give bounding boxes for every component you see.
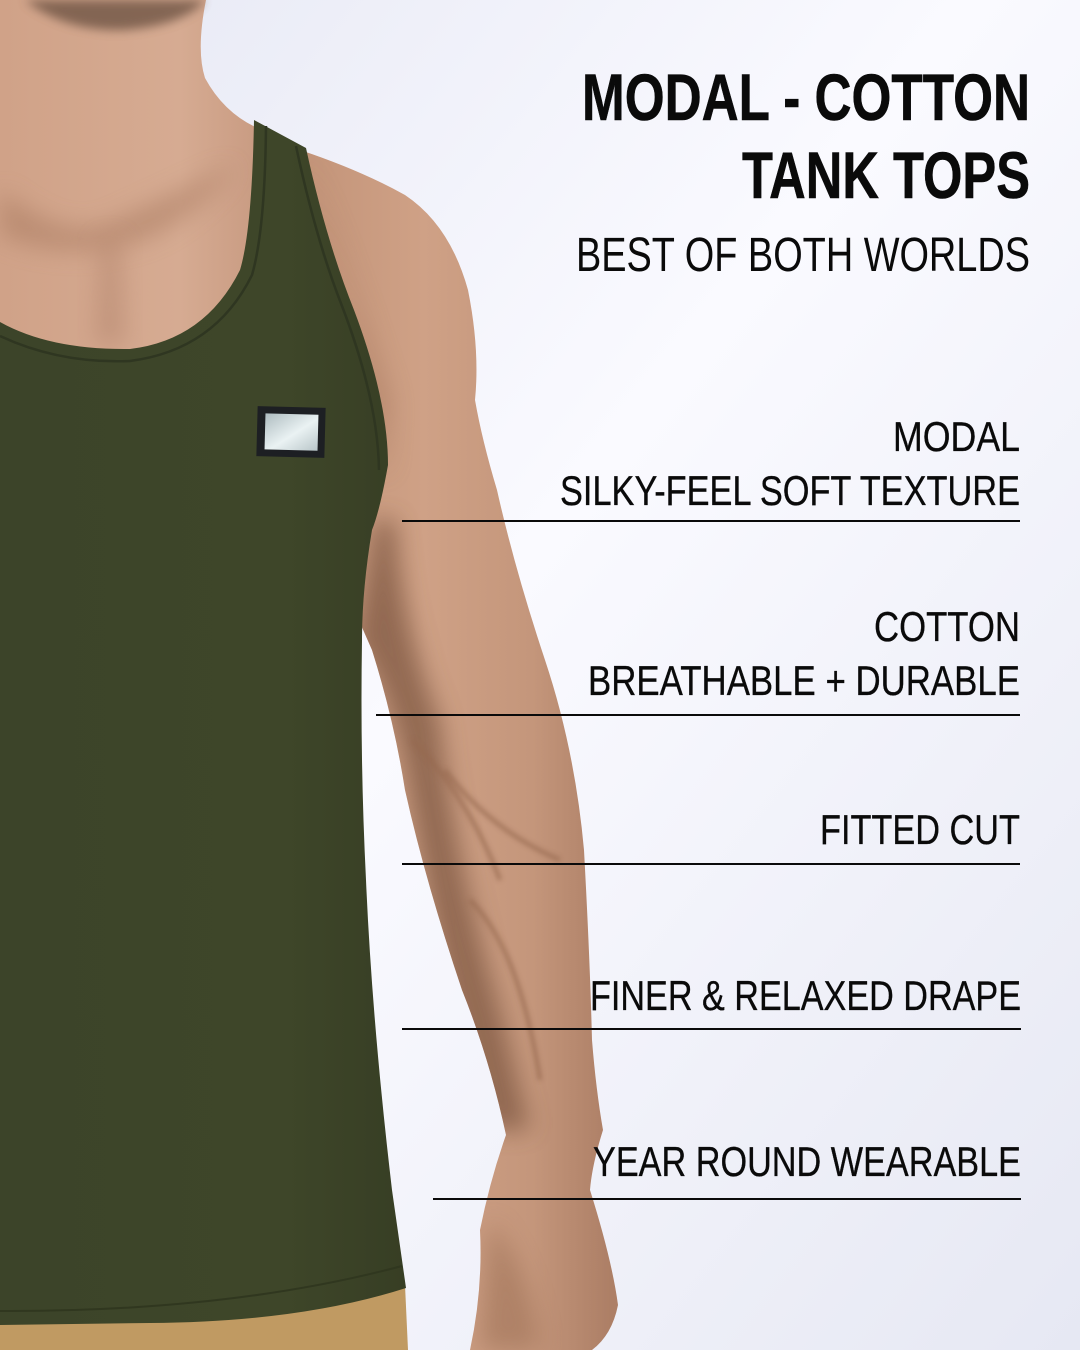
title [582, 60, 1030, 212]
neckline and armhole binding [0, 126, 379, 470]
tank top [0, 120, 406, 1325]
forearm veins [439, 770, 560, 1080]
feature: fitted cut: FITTED CUT [820, 806, 1020, 853]
feature: modal [402, 413, 1020, 522]
feature: modal: MODAL [893, 413, 1020, 460]
inner arm shadow [355, 520, 530, 1130]
collarbone and neck shading [0, 165, 235, 251]
hand shadow [480, 1220, 540, 1350]
hem seam [0, 1266, 402, 1311]
feature: cotton: COTTON [874, 603, 1020, 650]
chest and neck skin [0, 0, 300, 400]
chest centre shadow [95, 240, 125, 345]
trousers [0, 1285, 408, 1350]
feature: cotton [376, 603, 1020, 716]
beard shadow [25, 0, 205, 30]
photo: man wearing tank top [0, 0, 630, 1350]
chest badge [256, 406, 326, 458]
shoulder shadow [365, 340, 392, 434]
shoulder and arm skin [307, 152, 618, 1350]
